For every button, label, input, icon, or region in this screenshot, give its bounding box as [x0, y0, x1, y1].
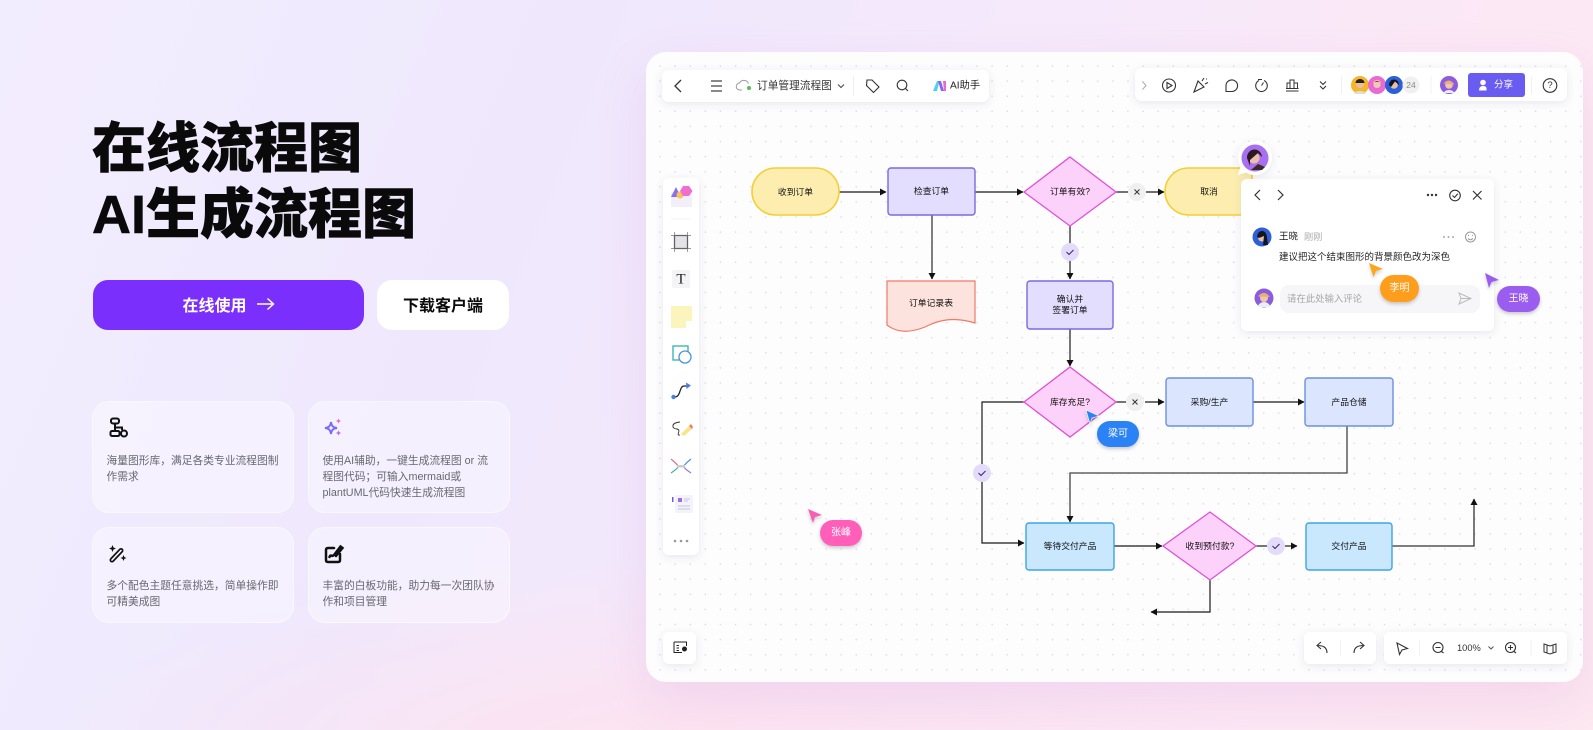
feature text: 多个配色主题任意挑选，简单操作即 — [106, 580, 279, 592]
icon: search — [897, 80, 908, 91]
node: 等待交付产品: 等待交付产品 — [1044, 540, 1097, 551]
icon: pointer — [1397, 643, 1408, 654]
top-right toolbar — [1135, 68, 1567, 101]
icon: stats — [1286, 80, 1298, 91]
bottom-right history toolbar — [1304, 632, 1376, 664]
comment panel — [1241, 179, 1494, 331]
node: 检查订单: 检查订单 — [914, 185, 949, 196]
badge: no — [1128, 183, 1146, 201]
icon: mind map — [671, 459, 691, 473]
icon: map — [1544, 644, 1556, 654]
icon: sticky note — [671, 306, 692, 328]
icon: undo — [1317, 642, 1327, 653]
cursor: 李明: 李明 — [1390, 281, 1410, 294]
feature text: plantUML代码快速生成流程图 — [322, 486, 465, 498]
node: 收到预付款: 收到预付款? — [1186, 540, 1235, 551]
icon: card template — [672, 495, 693, 513]
AI assistant label: AI助手 — [950, 78, 980, 92]
cursor: 李明 — [1369, 263, 1419, 302]
icon: back — [675, 80, 681, 92]
node: 库存充足 — [1024, 367, 1116, 437]
node: 取消 — [1165, 168, 1252, 215]
cursor: 王晓: 王晓 — [1508, 292, 1528, 304]
icon: comment — [1226, 80, 1238, 92]
node: 采购/生产: 采购/生产 — [1191, 396, 1229, 407]
node: 采购/生产 — [1166, 378, 1253, 426]
cursor: 梁可 — [1086, 410, 1139, 447]
feature card: AI assist — [308, 401, 510, 513]
feature text: 作需求 — [106, 470, 139, 482]
left toolbox — [663, 178, 699, 555]
feature text: 海量图形库，满足各类专业流程图制 — [106, 454, 279, 466]
feature text: 丰富的白板功能，助力每一次团队协 — [322, 580, 495, 592]
icon: menu — [711, 81, 722, 91]
node: 收到预付款 — [1163, 512, 1256, 580]
icon: redo — [1354, 642, 1364, 653]
icon: text: T — [676, 272, 686, 288]
icon: shape library — [671, 186, 692, 207]
icon: zoom dropdown — [1488, 646, 1494, 649]
icon: close — [1473, 191, 1482, 200]
icon: zoom out — [1433, 642, 1444, 653]
feature text — [322, 580, 495, 608]
icon: more — [1320, 82, 1326, 89]
flowchart — [752, 157, 1474, 612]
feature text: 使用AI辅助，一键生成流程图 or 流 — [322, 454, 488, 466]
feature text: 作和项目管理 — [322, 596, 387, 608]
node: 确认并签署订单 — [1027, 281, 1113, 329]
icon: cloud status — [736, 80, 751, 90]
node: 产品仓储: 产品仓储 — [1331, 396, 1367, 407]
node: 检查订单 — [888, 168, 975, 215]
cursor: 梁可: 梁可 — [1108, 426, 1128, 440]
button: download client — [377, 280, 509, 330]
feature text — [106, 454, 279, 482]
icon: more — [1427, 194, 1437, 196]
icon: text — [672, 270, 690, 288]
avatars — [1351, 76, 1420, 94]
connectors — [839, 192, 1474, 612]
icon: send — [1459, 293, 1471, 304]
title: 在线流程图 — [92, 118, 362, 178]
badge: no — [1126, 393, 1144, 411]
cursor: 张峰 — [808, 509, 862, 546]
badge: yes — [1267, 537, 1285, 555]
title: AI生成流程图 — [92, 185, 416, 245]
node: 确认并签署订单: 确认并 — [1057, 293, 1083, 304]
feature text — [106, 580, 279, 608]
icon: help — [1543, 79, 1557, 92]
icon: AI logo — [933, 81, 946, 91]
node: 订单有效: 订单有效? — [1050, 186, 1090, 196]
icon: whiteboard pen — [324, 544, 344, 564]
node: 收到订单 — [752, 168, 839, 215]
node: 产品仓储 — [1305, 378, 1393, 426]
icon: dropdown — [838, 84, 844, 88]
node: 确认并签署订单: 签署订单 — [1052, 304, 1088, 315]
button: use online — [93, 280, 364, 330]
feature text: 可精美成图 — [106, 596, 160, 608]
node: 取消: 取消 — [1200, 186, 1218, 196]
comment input: 请在此处输入评论 — [1287, 293, 1363, 304]
feature text: 程图代码；可输入mermaid或 — [322, 470, 461, 482]
icon: resolve — [1450, 190, 1460, 201]
icon: help: ? — [1547, 80, 1553, 91]
node: 订单记录表 — [887, 281, 975, 331]
icon: connector — [671, 382, 691, 399]
button: download client: 下载客户端 — [403, 298, 483, 315]
file name: 订单管理流程图 — [757, 79, 832, 92]
cursor: 王晓 — [1485, 273, 1540, 312]
feature card: whiteboard — [308, 527, 510, 623]
icon: play — [1162, 79, 1176, 92]
feature card: colour themes — [92, 527, 294, 623]
node: 交付产品: 交付产品 — [1331, 540, 1367, 551]
panel: flowchart editor — [646, 52, 1583, 682]
icon: previous and next — [1255, 190, 1283, 200]
comment input — [1280, 285, 1480, 313]
icon: pen — [673, 422, 693, 436]
icon: sparkles — [324, 418, 342, 436]
bottom-right zoom toolbar — [1384, 632, 1567, 664]
icon: more tools — [674, 540, 688, 542]
node: 交付产品 — [1306, 523, 1392, 570]
node: 订单有效 — [1024, 157, 1116, 226]
share button — [1468, 73, 1525, 97]
node: 收到订单: 收到订单 — [778, 186, 813, 197]
node: 订单记录表: 订单记录表 — [909, 297, 953, 308]
icon: party — [1194, 78, 1208, 92]
node: 库存充足: 库存充足? — [1050, 396, 1090, 407]
icon: smile — [1466, 232, 1476, 242]
comment marker avatar — [1238, 141, 1272, 175]
comment text: 建议把这个结束图形的背景颜色改为深色 — [1279, 251, 1451, 263]
icon: zoom in — [1506, 642, 1516, 653]
node: 等待交付产品 — [1026, 523, 1114, 570]
icon: flow shapes — [110, 418, 128, 438]
zoom level: 100% — [1457, 643, 1481, 653]
avatar: self — [1254, 288, 1274, 308]
comment time: 刚刚 — [1304, 232, 1322, 242]
share button: 分享 — [1494, 78, 1513, 90]
avatars: 24 — [1406, 80, 1416, 90]
icon: frame — [671, 232, 691, 252]
bottom-left map button — [663, 632, 696, 664]
avatar: self — [1440, 76, 1458, 94]
icon: shapes — [673, 346, 691, 363]
badge: yes — [1061, 243, 1079, 261]
avatar: 王晓 — [1252, 228, 1272, 246]
icon: expand — [1142, 82, 1146, 90]
icon: comment options — [1443, 236, 1454, 238]
icon: magic wand — [109, 545, 126, 562]
commenter name: 王晓 — [1279, 230, 1298, 242]
badge: yes — [973, 464, 991, 482]
title — [92, 118, 416, 245]
icon: timer — [1256, 80, 1267, 92]
button: use online: 在线使用 — [182, 298, 246, 315]
feature card: shape library — [92, 401, 294, 513]
top-left toolbar — [662, 70, 989, 102]
icon: tag — [866, 80, 879, 92]
feature text — [322, 454, 488, 498]
cursor: 张峰: 张峰 — [831, 526, 851, 538]
